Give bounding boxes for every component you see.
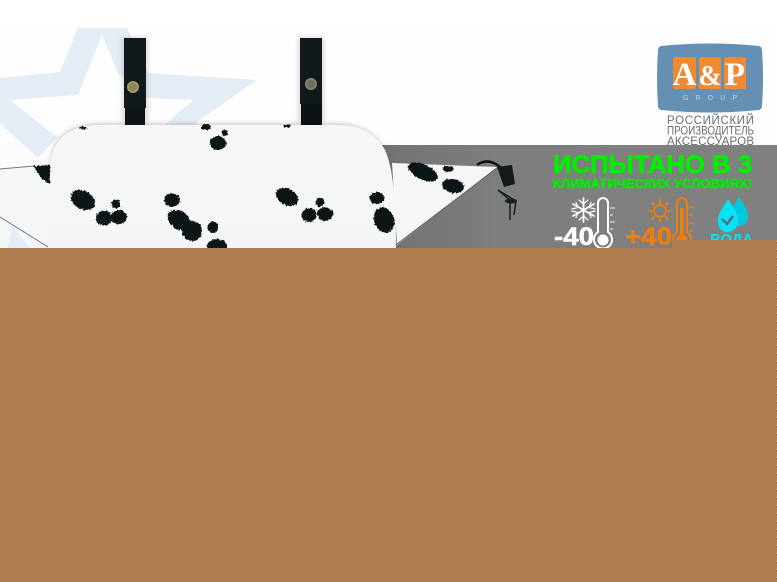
logo squares <box>673 57 746 89</box>
spots <box>33 124 465 253</box>
logo letters: P <box>725 57 745 93</box>
cold value: -40 <box>554 223 594 251</box>
product: garment <box>0 37 517 253</box>
icon: sun <box>649 200 671 222</box>
banner subtitle: КЛИМАТИЧЕСКИХ УСЛОВИЯХ! <box>553 176 752 191</box>
logo tagline: РОССИЙСКИЙ <box>667 114 754 127</box>
brown patterned overlay <box>0 240 777 582</box>
logo tagline: ПРОИЗВОДИТЕЛЬ <box>667 126 754 138</box>
logo badge <box>657 44 763 112</box>
product shadow <box>50 124 397 250</box>
adjuster cord and toggle <box>477 161 517 220</box>
logo group text: GROUP <box>683 95 737 102</box>
icon: thermometer orange <box>673 198 694 248</box>
icon: heat +40 <box>625 198 694 251</box>
icon: thermometer white <box>594 198 615 248</box>
icon: cold -40 <box>554 198 615 251</box>
grey banner <box>380 145 777 248</box>
logo tagline: АКСЕССУАРОВ <box>667 136 754 148</box>
icon: water drops <box>710 197 753 249</box>
right strap <box>298 37 324 126</box>
background <box>0 0 777 248</box>
icon: snowflake <box>572 198 595 222</box>
main panel <box>50 125 396 248</box>
logo letters: & <box>698 61 722 92</box>
logo: A&P Group <box>657 44 763 148</box>
heat value: +40 <box>625 223 672 251</box>
logo letters: A <box>673 57 697 93</box>
left wing <box>0 165 50 248</box>
logo letters <box>673 57 745 93</box>
banner headline: ИСПЫТАНО В 3 <box>553 151 752 179</box>
decorative star outline <box>0 28 257 248</box>
banner headline <box>553 151 752 191</box>
water label: ВОДА <box>710 232 753 249</box>
right wing <box>392 163 497 245</box>
left strap <box>122 37 148 126</box>
logo tagline <box>667 114 754 148</box>
